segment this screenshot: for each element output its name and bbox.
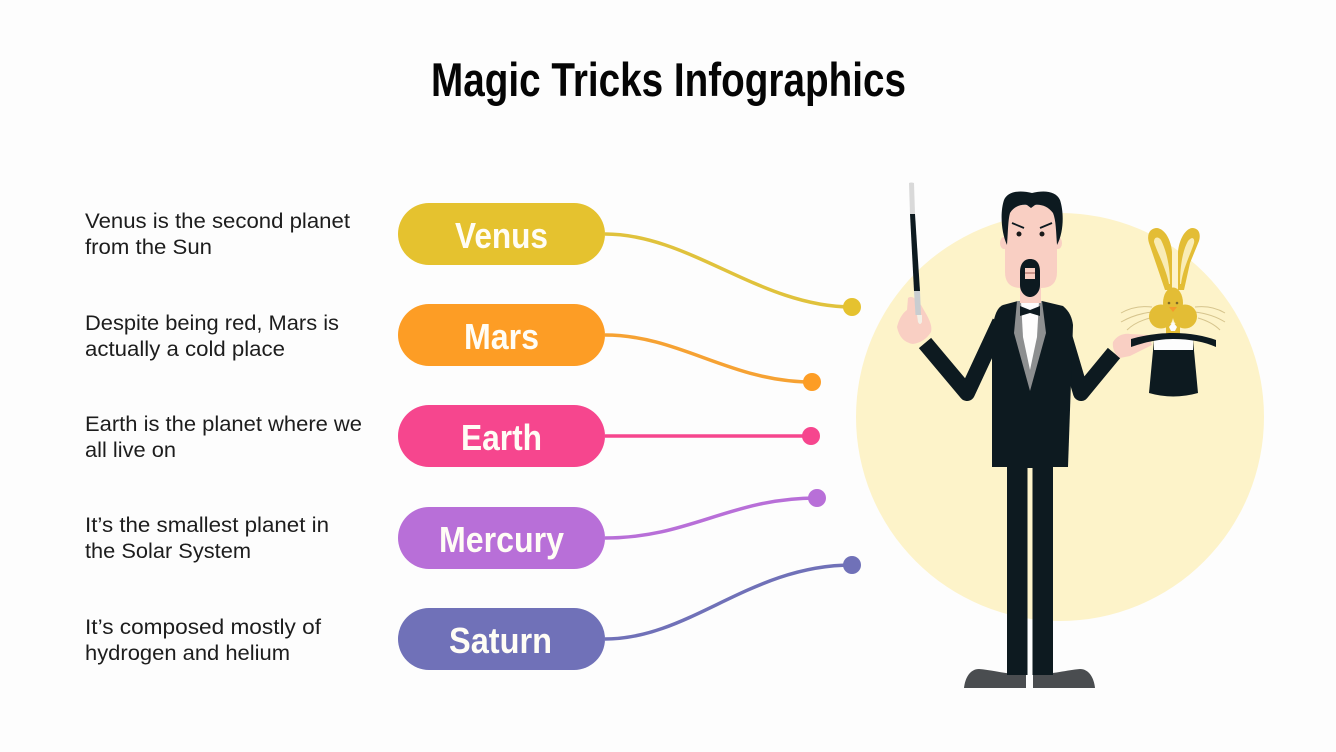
connector: Saturn <box>605 556 861 639</box>
icon: goatee <box>1020 259 1040 297</box>
connector: Venus <box>605 234 861 316</box>
icon: eyes and brows <box>1012 223 1052 236</box>
text block: Mercury description: the Solar System <box>85 540 251 563</box>
icon: arms <box>925 322 1114 393</box>
icon: shoes <box>964 669 1095 688</box>
background circle <box>856 213 1264 621</box>
pill: Earth: Earth <box>461 417 542 458</box>
text block: Venus description: Venus is the second planet <box>85 210 350 233</box>
icon: face <box>1005 205 1057 288</box>
pill: Mercury <box>398 507 605 569</box>
icon: bow tie <box>1020 306 1040 316</box>
magician illustration <box>897 182 1225 688</box>
icon: hair <box>1002 191 1063 245</box>
panel: Earth row <box>85 405 820 467</box>
icon: neck <box>1020 285 1041 303</box>
connector: Mars <box>605 335 821 391</box>
panel: Mars row <box>85 304 821 391</box>
icon: jacket <box>992 301 1073 467</box>
pill: Saturn: Saturn <box>449 620 552 661</box>
icon: rabbit ears <box>1148 228 1200 290</box>
icon: rabbit whiskers <box>1121 307 1225 330</box>
icon: rabbit head <box>1149 288 1197 334</box>
icon: legs <box>1007 460 1053 675</box>
connector: Mercury <box>605 489 826 538</box>
icon: ears <box>1000 237 1062 249</box>
pill: Mars <box>398 304 605 366</box>
panel: Venus row <box>85 203 861 316</box>
icon: top hat <box>1131 333 1216 396</box>
panel: Saturn row <box>85 556 861 670</box>
icon: shirt <box>1021 301 1039 370</box>
connector: Earth <box>605 427 820 445</box>
pill: Earth <box>398 405 605 467</box>
icon: right hand <box>1113 334 1152 358</box>
icon: wand <box>909 182 922 324</box>
pill: Mercury: Mercury <box>439 519 564 560</box>
text block: Venus description: from the Sun <box>85 236 212 259</box>
icon: lapels <box>1014 301 1046 391</box>
text block: Mars description: Despite being red, Mars is <box>85 312 339 335</box>
text block: Saturn description: It’s composed mostly of <box>85 616 321 639</box>
pill: Mars: Mars <box>464 316 539 357</box>
text block: Mercury description: It’s the smallest planet in <box>85 514 329 537</box>
text block: Earth description: Earth is the planet where we <box>85 413 362 436</box>
icon: rabbit face <box>1168 302 1178 331</box>
pill: Venus <box>398 203 605 265</box>
text block: Mars description: actually a cold place <box>85 338 285 361</box>
panel: Mercury row <box>85 489 826 569</box>
icon: left hand <box>897 297 931 344</box>
icon: rabbit in hat <box>1121 228 1225 396</box>
pill: Venus: Venus <box>455 215 548 256</box>
text block: Saturn description: hydrogen and helium <box>85 642 290 665</box>
text block: Earth description: all live on <box>85 439 176 462</box>
pill: Saturn <box>398 608 605 670</box>
title: Magic Tricks Infographics <box>431 53 906 106</box>
